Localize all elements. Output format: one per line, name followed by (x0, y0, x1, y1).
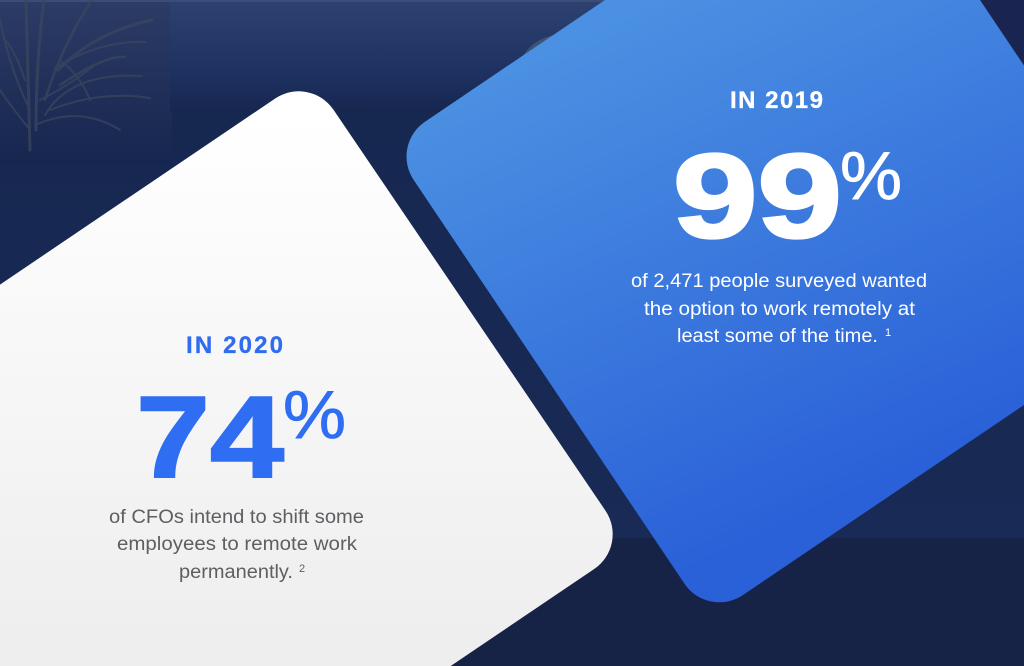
big number: 74 percent: 74 (136, 372, 284, 502)
icon: cushion detail behind blue panel (520, 34, 565, 62)
description: 2020 CFOs (109, 507, 364, 583)
big number: 74 percent (136, 372, 346, 502)
description: 2019 survey: of 2,471 people surveyed wanted (631, 271, 927, 292)
big number: 74 percent: % (283, 377, 346, 453)
heading: in 2020: IN 2020 (186, 332, 283, 359)
icon: potted plant leaves (0, 0, 152, 150)
panel: 2019 blue diamond (407, 0, 1024, 602)
top-right corner shadow (975, 0, 1024, 65)
description: 2019 survey: 1 (885, 327, 891, 339)
description: 2019 survey: least some of the time. (677, 326, 878, 347)
big number: 99 percent (673, 130, 902, 263)
big number: 99 percent: 99 (673, 130, 842, 263)
panel: 2020 white diamond (0, 91, 613, 666)
description: 2020 CFOs: of CFOs intend to shift some (109, 507, 364, 528)
description: 2019 survey: the option to work remotely at (644, 299, 916, 320)
description: 2019 survey (631, 271, 927, 347)
description: 2020 CFOs: permanently. (179, 562, 293, 583)
description: 2020 CFOs: 2 (299, 563, 305, 575)
big number: 99 percent: % (840, 138, 902, 214)
description: 2020 CFOs: employees to remote work (117, 534, 358, 555)
heading: in 2019: IN 2019 (730, 87, 823, 114)
